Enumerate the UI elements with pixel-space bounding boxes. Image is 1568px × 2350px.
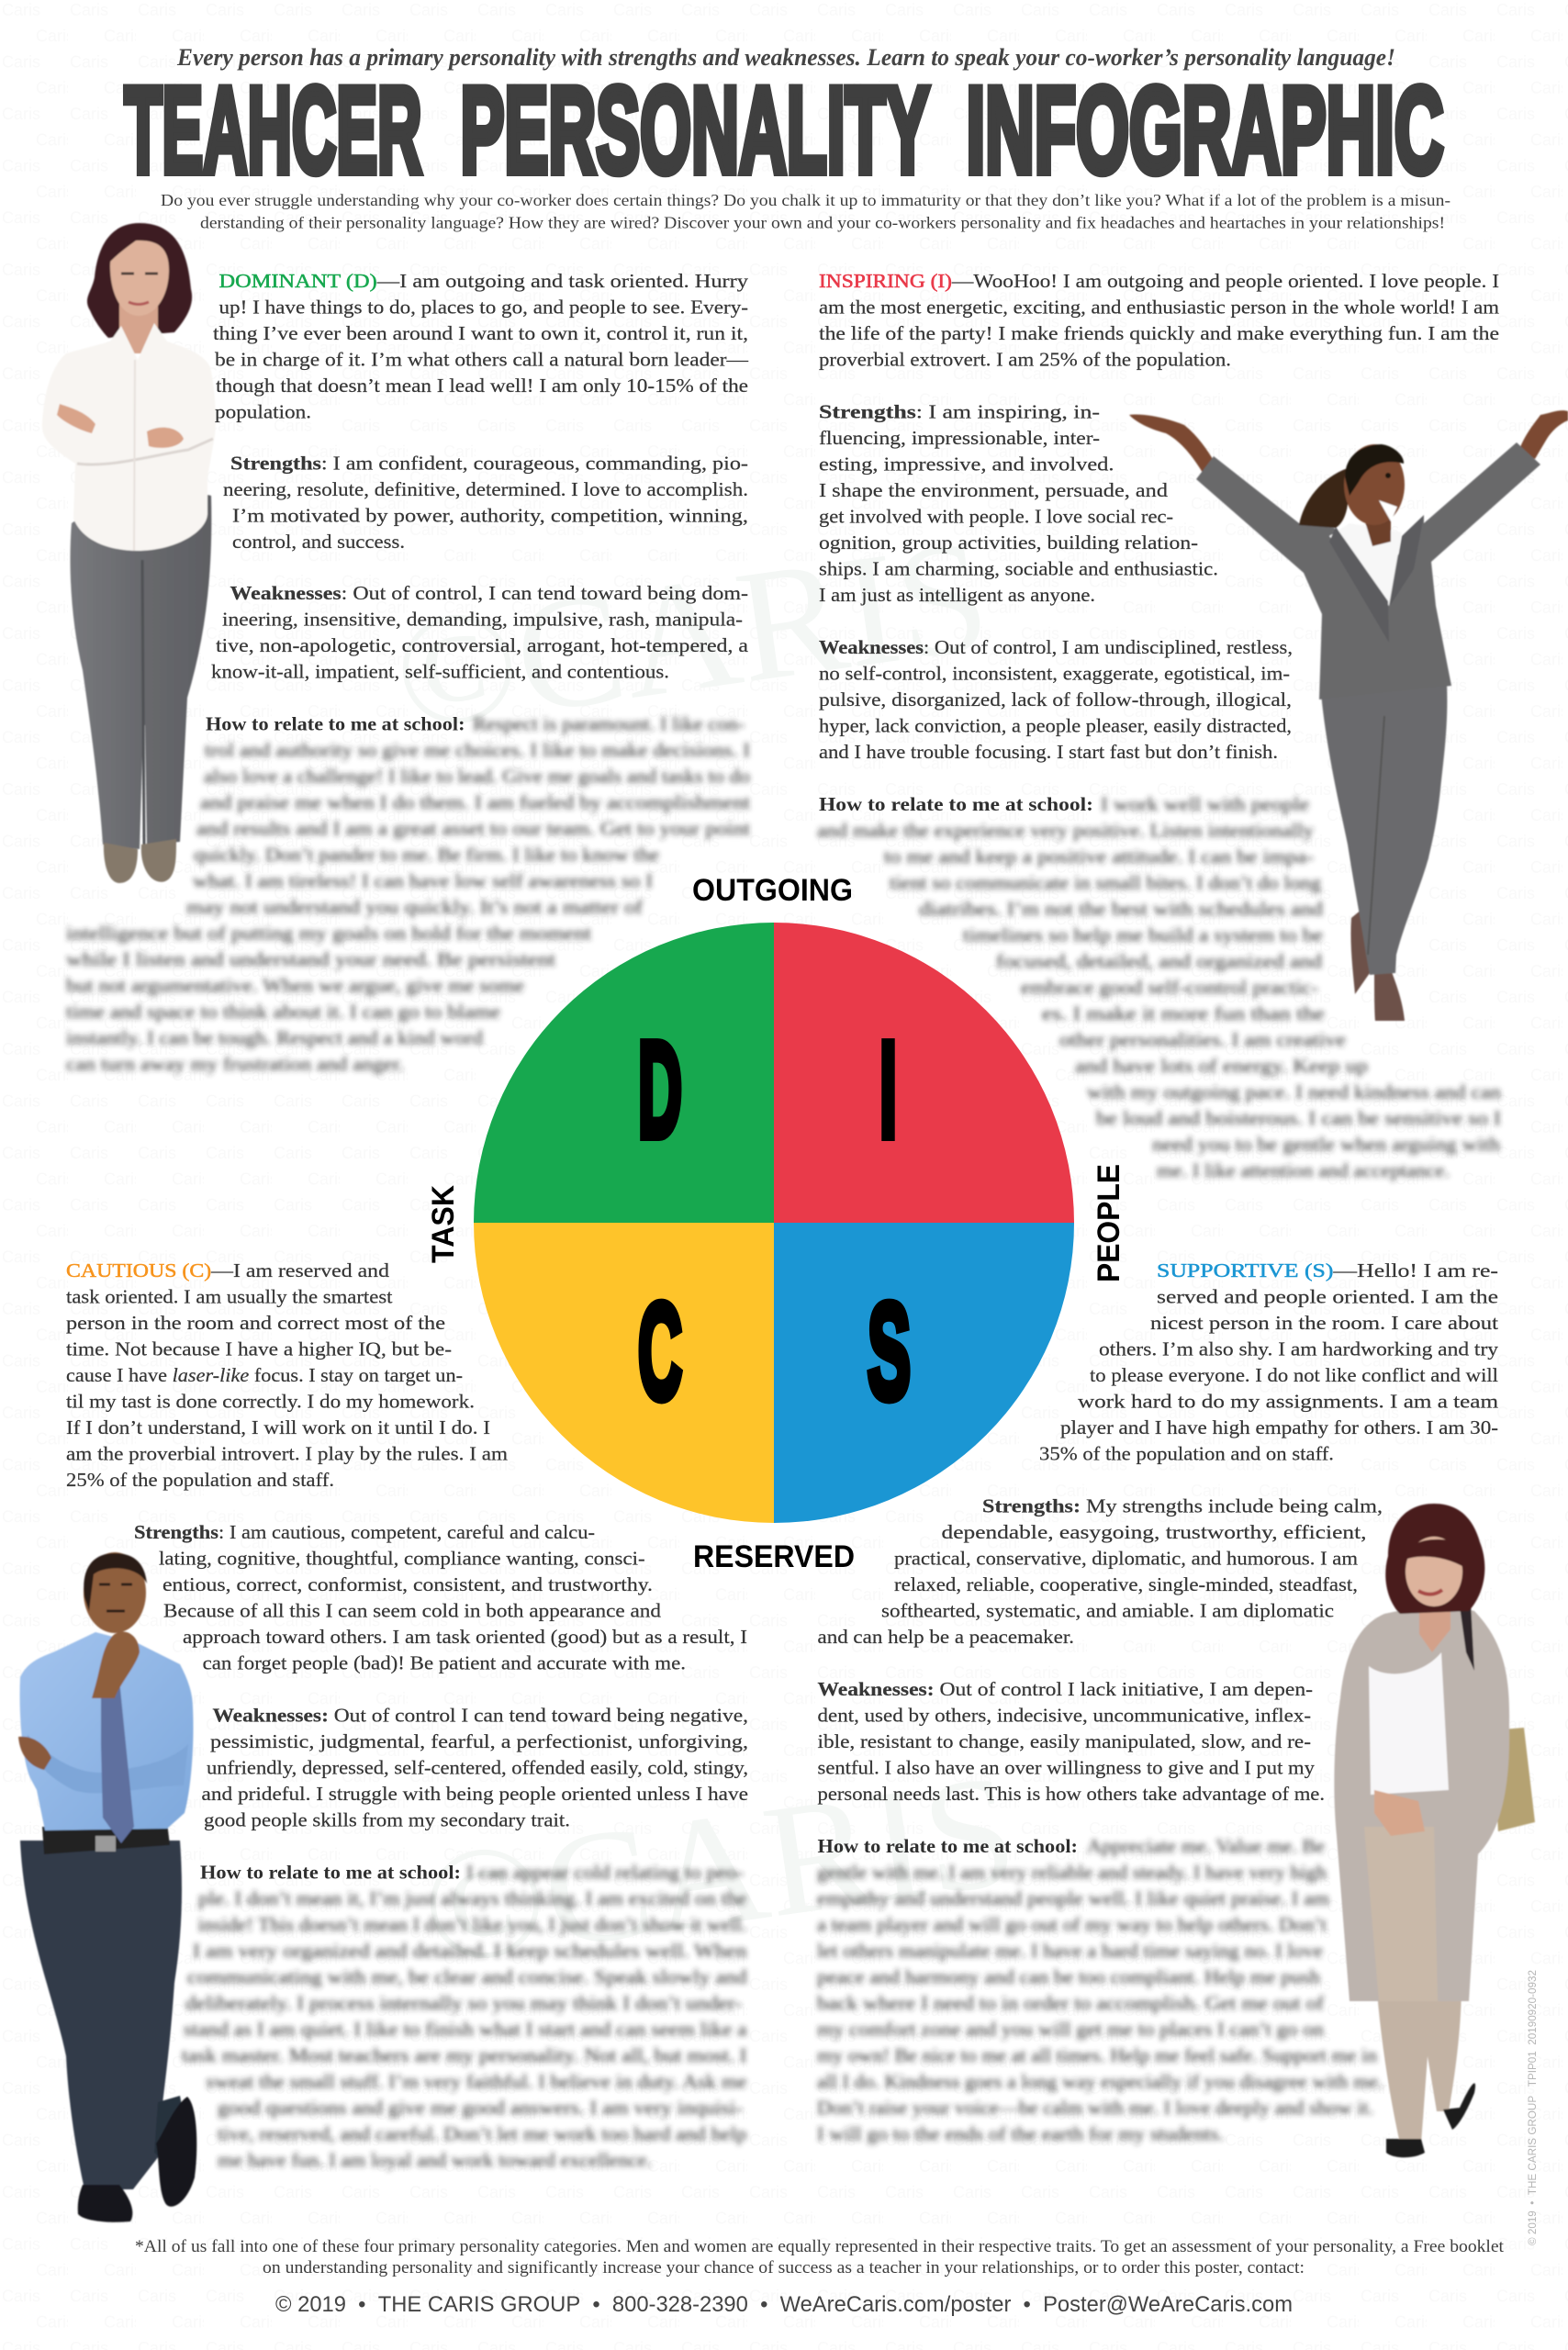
cautious how to relate: ple. I don’t mean it, I’m just always thinking. I am excited on the [198, 1887, 747, 1909]
inspiring how to relate: me. I like attention and acceptance. [1157, 1159, 1450, 1181]
axis label people: PEOPLE [1092, 1164, 1126, 1282]
dominant how to relate: trol and authority so give me choices. I like to make decisions. I [205, 739, 750, 761]
dominant how to relate: also love a challenge! I like to lead. Give me goals and tasks to do [204, 766, 750, 788]
inspiring how to relate: with my outgoing pace. I need kindness and can [1087, 1081, 1501, 1103]
footnote: on understanding personality and significantly increase your chance of success as a teacher in your relationships, or to order this poster, contact: [263, 2259, 1305, 2277]
inspiring strengths: ognition, group activities, building relation- [819, 532, 1198, 554]
photo: inspiring woman [1129, 410, 1568, 1021]
intro paragraph: Do you ever struggle understanding why your co-worker does certain things? Do you chalk it up to immaturity or that they don’t like you? What if a lot of the problem is a misun- [161, 191, 1450, 209]
supportive how to relate: let others manipulate me. I have a hard time saying no. I love [817, 1940, 1323, 1962]
supportive intro: SUPPORTIVE (S) —Hello! I am re- [1157, 1259, 1498, 1281]
inspiring strengths: I am just as intelligent as anyone. [819, 584, 1095, 606]
dominant weaknesses [211, 582, 748, 683]
dominant how to relate: what. I am tireless! I can have low self awareness so I [193, 870, 653, 892]
supportive weaknesses: Weaknesses: Out of control I lack initiative, I am depen- [817, 1678, 1313, 1700]
inspiring how to relate: other personalities. I am creative [1059, 1029, 1346, 1051]
inspiring how to relate: and make the experience very positive. Listen intentionally [817, 820, 1314, 842]
cautious intro: task oriented. I am usually the smartest [66, 1286, 393, 1308]
cautious intro: person in the room and correct most of the [66, 1312, 445, 1334]
cautious how to relate: task master. Most teachers are my personality. Not all, but most. I [182, 2044, 747, 2066]
cautious strengths: lating, cognitive, thoughtful, compliance wanting, consci- [159, 1548, 645, 1570]
cautious intro: am the proverbial introvert. I play by the rules. I am [66, 1443, 508, 1465]
supportive how to relate: Appreciate me. Value me. Be [1087, 1835, 1325, 1857]
supportive how to relate: a team player and will go out of my way to help others. Don’t [817, 1914, 1327, 1936]
inspiring weaknesses: pulsive, disorganized, lack of follow-through, illogical, [819, 688, 1292, 711]
supportive intro: work hard to do my assignments. I am a team [1078, 1391, 1498, 1413]
inspiring weaknesses: no self-control, inconsistent, exaggerate, egotistical, im- [819, 663, 1290, 685]
dominant how to relate [66, 713, 750, 1075]
supportive strengths: and can help be a peacemaker. [817, 1626, 1074, 1648]
cautious intro: If I don’t understand, I will work on it until I do. I [66, 1416, 490, 1438]
cautious how to relate [182, 1862, 747, 2171]
cautious strengths: approach toward others. I am task oriented (good) but as a result, I [183, 1626, 747, 1648]
supportive intro: 35% of the population and on staff. [1039, 1443, 1334, 1465]
supportive intro: player and I have high empathy for others. I am 30- [1060, 1416, 1498, 1438]
inspiring how to relate: and have lots of energy. Keep up [1075, 1055, 1368, 1077]
supportive intro: nicest person in the room. I care about [1150, 1312, 1498, 1334]
cautious intro: time. Not because I have a higher IQ, but be- [66, 1338, 452, 1360]
intro paragraph [161, 191, 1450, 231]
inspiring how to relate: timelines so help me build a system to be [963, 924, 1323, 946]
cautious how to relate: I am very organized and detailed. I keep schedules well. When [193, 1940, 747, 1962]
dominant how to relate: and praise me when I do them. I am fueled by accomplishment [200, 791, 750, 813]
axis label outgoing: OUTGOING [692, 873, 853, 908]
supportive weaknesses [817, 1678, 1325, 1805]
inspiring how to relate: I work well with people [1101, 793, 1309, 815]
cautious how to relate: inside! This doesn’t mean I don’t like you, I just don’t show it well. [198, 1914, 747, 1936]
cautious strengths: entious, correct, conformist, consistent, and trustworthy. [162, 1573, 653, 1595]
dominant intro: be in charge of it. I’m what others call a natural born leader— [215, 349, 748, 371]
inspiring strengths: esting, impressive, and involved. [819, 453, 1114, 476]
cautious how to relate: tive, reserved, and careful. Don’t let me work too hard and help [218, 2123, 747, 2145]
inspiring how to relate: to me and keep a positive attitude. I can be impa- [884, 845, 1314, 867]
large watermark lower: ©CARIS [411, 1740, 1025, 1999]
cautious intro [66, 1259, 508, 1491]
inspiring how to relate [817, 793, 1501, 1181]
title: PERSONALITY [461, 62, 929, 198]
dominant strengths: control, and success. [232, 531, 405, 553]
inspiring strengths [819, 401, 1218, 606]
inspiring intro: proverbial extrovert. I am 25% of the population. [819, 349, 1231, 371]
inspiring weaknesses: and I have trouble focusing. I start fast but don’t finish. [819, 741, 1278, 763]
dominant intro: thing I’ve ever been around I want to own it, control it, run it, [213, 322, 748, 344]
photo: supportive woman [1334, 1504, 1535, 2157]
supportive intro [1039, 1259, 1498, 1465]
supportive how to relate: all I do. Kindness goes a long way especially if you disagree with me. [817, 2071, 1383, 2093]
cautious how to relate: sweat the small stuff. I’m very faithful. I believe in duty. Ask me [206, 2071, 747, 2093]
supportive intro: to please everyone. I do not like conflict and will [1090, 1364, 1498, 1386]
dominant how to relate: instantly. I can be tough. Respect and a kind word [66, 1027, 483, 1049]
cautious how to relate: me have fun. I am loyal and work toward excellence. [218, 2149, 652, 2171]
inspiring how to relate: How to relate to me at school: [819, 793, 1093, 815]
cautious strengths: can forget people (bad)! Be patient and accurate with me. [203, 1652, 686, 1674]
inspiring how to relate: es. I make it more fun than the [1042, 1002, 1325, 1024]
side print code: © 2019 • THE CARIS GROUP TPIP01 20190920-0932 [1528, 1970, 1539, 2245]
inspiring intro: INSPIRING (I) —WooHoo! I am outgoing and people oriented. I love people. I [819, 270, 1499, 292]
cautious strengths: Because of all this I can seem cold in both appearance and [163, 1600, 661, 1622]
inspiring how to relate: focused, detailed, and organized and [996, 950, 1322, 972]
photo: cautious man [18, 1552, 196, 2222]
panel: supportive [817, 1259, 1498, 2145]
dominant weaknesses: tive, non-apologetic, controversial, arrogant, hot-tempered, a [216, 634, 748, 656]
DISC chart: I [879, 1014, 897, 1166]
dominant weaknesses: Weaknesses : Out of control, I can tend toward being dom- [230, 582, 748, 604]
dominant how to relate: Respect is paramount. I like con- [473, 713, 745, 735]
dominant strengths: Strengths : I am confident, courageous, commanding, pio- [230, 453, 748, 475]
footnote: *All of us fall into one of these four primary personality categories. Men and women are equally represented in their respective traits. To get an assessment of your personality, a Free booklet [135, 2238, 1505, 2256]
supportive weaknesses: sentful. I also have an over willingness to give and I put my [817, 1757, 1315, 1779]
dominant how to relate: How to relate to me at school: [206, 713, 465, 735]
supportive how to relate: Don’t raise your voice—be calm with me. I love deeply and show it. [817, 2097, 1373, 2119]
supportive intro: others. I’m also shy. I am hardworking and try [1099, 1338, 1498, 1360]
inspiring how to relate: diatribes. I’m not the best with schedules and [919, 898, 1323, 920]
supportive weaknesses: dent, used by others, indecisive, uncommunicative, inflex- [817, 1705, 1311, 1727]
cautious strengths [134, 1521, 747, 1674]
panel: cautious [66, 1259, 748, 2171]
footnote [135, 2238, 1505, 2277]
inspiring how to relate: be loud and boisterous. I can be sensitive so I [1096, 1107, 1501, 1129]
dominant how to relate: may not understand you quickly. It’s not a matter of [186, 896, 644, 918]
supportive how to relate: my own! Be nice to me at all times. Help me feel safe. Support me in [817, 2044, 1377, 2066]
large watermark upper: ©CARIS [384, 505, 998, 765]
contact line: © 2019 • THE CARIS GROUP • 800-328-2390 • WeAreCaris.com/poster • Poster@WeAreCaris.com [275, 2292, 1293, 2317]
panel: inspiring [817, 270, 1501, 1181]
inspiring strengths: ships. I am charming, sociable and enthusiastic. [819, 558, 1218, 580]
dominant intro: DOMINANT (D) —I am outgoing and task oriented. Hurry [218, 270, 748, 292]
dominant how to relate: intelligence but of putting my goals on hold for the moment [66, 923, 591, 945]
title: TEAHCER [125, 62, 422, 198]
supportive how to relate: I will go to the ends of the earth for my students. [817, 2123, 1224, 2145]
tagline: Every person has a primary personality with strengths and weaknesses. Learn to speak your co-worker’s personality language! [176, 44, 1395, 71]
inspiring weaknesses [819, 636, 1293, 763]
inspiring weaknesses: Weaknesses: Out of control, I am undisciplined, restless, [819, 636, 1293, 658]
inspiring strengths: I shape the environment, persuade, and [819, 479, 1168, 501]
dominant intro [213, 270, 748, 423]
cautious how to relate: deliberately. I process internally so you may think I don’t under- [185, 1992, 742, 2014]
cautious weaknesses: pessimistic, judgmental, fearful, a perfectionist, unforgiving, [210, 1730, 748, 1752]
dominant weaknesses: know-it-all, impatient, self-sufficient, and contentious. [211, 661, 669, 683]
supportive strengths: softhearted, systematic, and amiable. I am diplomatic [881, 1600, 1334, 1622]
cautious intro: 25% of the population and staff. [66, 1469, 334, 1491]
inspiring how to relate: need you to be gentle when arguing with [1152, 1134, 1500, 1156]
inspiring strengths: Strengths : I am inspiring, in- [819, 401, 1100, 423]
DISC chart: D [638, 1014, 682, 1166]
dominant how to relate: time and space to think about it. I can go to blame [66, 1001, 500, 1023]
cautious intro: til my tast is done correctly. I do my homework. [66, 1391, 475, 1413]
supportive strengths: relaxed, reliable, cooperative, single-minded, steadfast, [894, 1573, 1358, 1595]
inspiring how to relate: embrace good self-control practic- [1021, 977, 1318, 999]
panel: dominant [66, 270, 750, 1075]
cautious weaknesses: unfriendly, depressed, self-centered, offended easily, cold, stingy, [207, 1757, 748, 1779]
dominant how to relate: can turn away my frustration and anger. [66, 1053, 404, 1075]
supportive intro: served and people oriented. I am the [1157, 1286, 1498, 1308]
cautious how to relate: stand as I am quiet. I like to finish what I start and can seem like a [184, 2019, 747, 2041]
supportive how to relate: back where I need to in order to accomplish. Get me out of [817, 1992, 1325, 2014]
axis label reserved: RESERVED [693, 1539, 855, 1574]
dominant weaknesses: ineering, insensitive, demanding, impulsive, rash, manipula- [222, 609, 743, 631]
supportive strengths [817, 1495, 1383, 1648]
dominant intro: up! I have things to do, places to go, and people to see. Every- [218, 297, 748, 319]
inspiring how to relate: tient so communicate in small bites. I don’t do long [890, 872, 1321, 894]
inspiring strengths: get involved with people. I love social rec- [819, 506, 1173, 528]
cautious weaknesses [202, 1705, 748, 1831]
supportive how to relate: empathy and understand people well. I like quiet praise. I am [817, 1887, 1329, 1909]
dominant how to relate: quickly. Don’t pander to me. Be firm. I like to know the [194, 844, 659, 866]
inspiring strengths: fluencing, impressionable, inter- [819, 427, 1100, 449]
cautious strengths: Strengths: I am cautious, competent, careful and calcu- [134, 1521, 595, 1543]
cautious how to relate: I can appear cold relating to peo- [466, 1862, 744, 1884]
cautious intro: cause I have laser-like focus. I stay on target un- [66, 1364, 463, 1386]
DISC chart [426, 873, 1126, 1574]
dominant how to relate: but not argumentative. When we argue, give me some [66, 975, 524, 997]
supportive how to relate: my comfort zone and you will get me to places I can’t go on [817, 2019, 1324, 2041]
supportive strengths: Strengths: My strengths include being calm, [982, 1495, 1383, 1517]
cautious intro: CAUTIOUS (C) —I am reserved and [66, 1259, 389, 1281]
supportive strengths: practical, conservative, diplomatic, and humorous. I am [894, 1548, 1358, 1570]
dominant strengths [223, 453, 748, 553]
supportive how to relate: gentle with me. I am very reliable and steady. I have very high [817, 1862, 1327, 1884]
dominant intro: though that doesn’t mean I lead well! I am only 10-15% of the [216, 375, 748, 397]
cautious weaknesses: Weaknesses: Out of control I can tend toward being negative, [213, 1705, 748, 1727]
inspiring intro [819, 270, 1499, 371]
title [125, 62, 1443, 198]
supportive how to relate: peace and harmony and can be too compliant. Help me push [817, 1966, 1320, 1988]
supportive weaknesses: ible, resistant to change, easily manipulated, slow, and re- [817, 1730, 1311, 1752]
axis label task: TASK [426, 1185, 461, 1263]
dominant strengths: neering, resolute, definitive, determined. I love to accomplish. [223, 478, 748, 500]
dominant how to relate: and results and I am a great asset to our team. Get to your point [196, 818, 750, 840]
photo: dominant woman [42, 223, 216, 883]
supportive how to relate [817, 1835, 1383, 2145]
DISC chart: C [638, 1276, 682, 1427]
DISC chart: S [868, 1276, 911, 1427]
inspiring intro: the life of the party! I make friends quickly and make everything fun. I am the [819, 322, 1499, 344]
dominant intro: population. [215, 401, 311, 423]
cautious how to relate: communicating with me, be clear and concise. Speak slowly and [187, 1966, 747, 1988]
intro paragraph: derstanding of their personality language? How they are wired? Discover your own and your co-workers personality and fix headaches and heartaches in your relationships! [200, 213, 1445, 231]
inspiring intro: am the most energetic, exciting, and enthusiastic person in the whole world! I am [819, 297, 1499, 319]
cautious weaknesses: good people skills from my secondary trait. [204, 1809, 570, 1831]
cautious how to relate: How to relate to me at school: [200, 1862, 461, 1884]
cautious how to relate: good questions and give me good answers. I am very inquisi- [218, 2097, 743, 2119]
cautious weaknesses: and prideful. I struggle with being people oriented unless I have [202, 1783, 748, 1805]
inspiring weaknesses: hyper, lack conviction, a people pleaser, easily distracted, [819, 715, 1292, 737]
dominant strengths: I’m motivated by power, authority, competition, winning, [232, 505, 748, 527]
supportive strengths: dependable, easygoing, trustworthy, efficient, [942, 1521, 1366, 1543]
supportive weaknesses: personal needs last. This is how others take advantage of me. [817, 1783, 1325, 1805]
dominant how to relate: while I listen and understand your need. Be persistent [66, 948, 555, 970]
supportive how to relate: How to relate to me at school: [817, 1835, 1078, 1857]
